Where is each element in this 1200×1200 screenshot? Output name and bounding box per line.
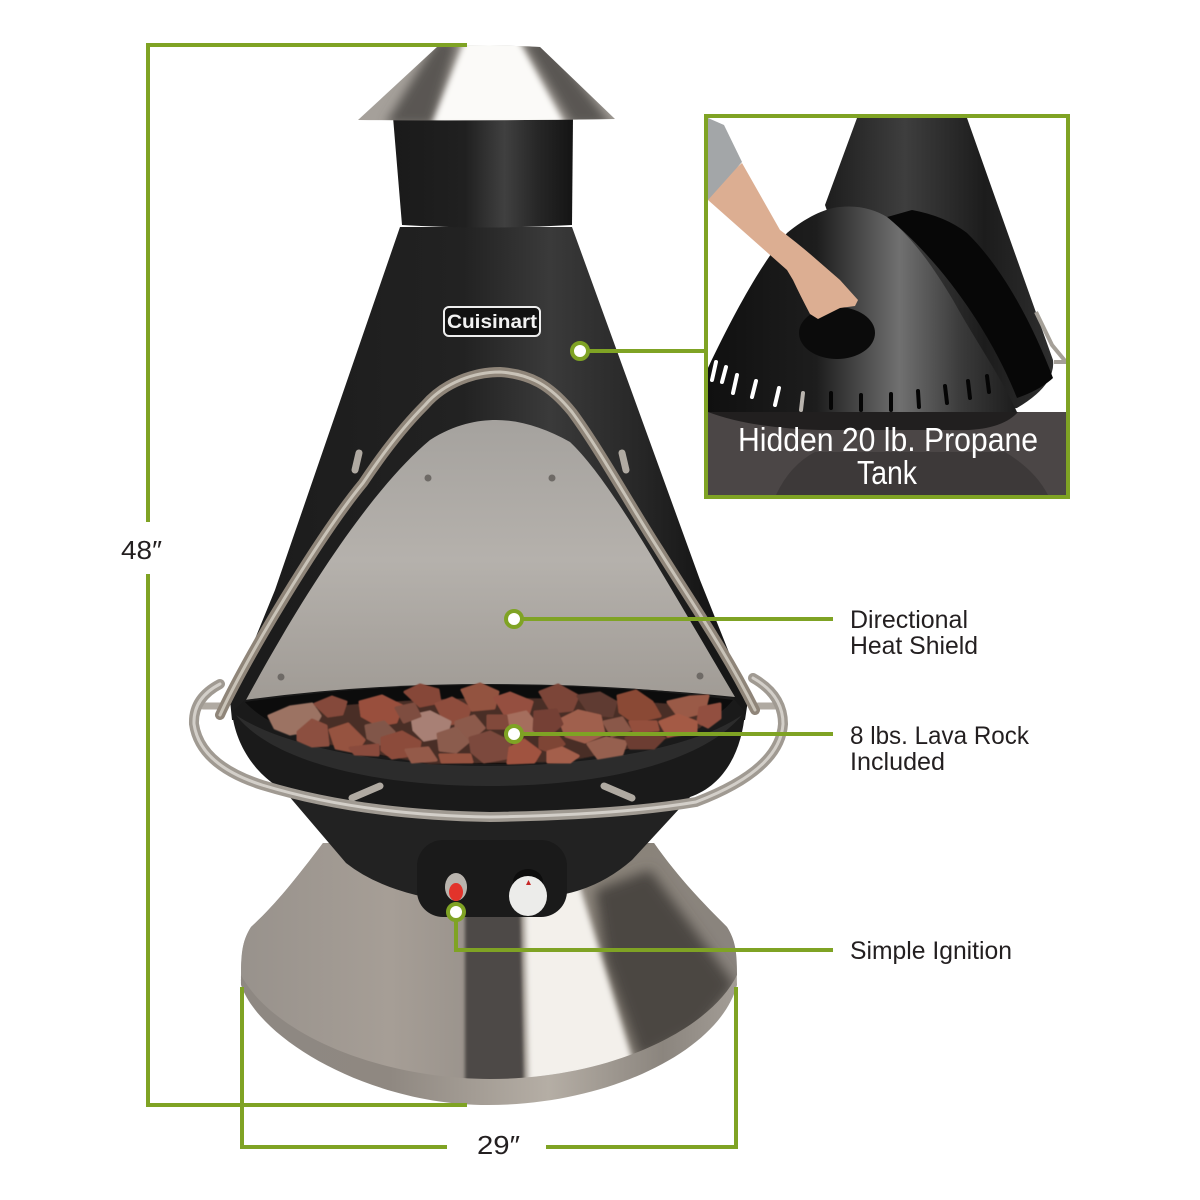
dimension: width 29 inches: 29″	[477, 1130, 520, 1160]
callout: lava rock included	[506, 722, 1029, 776]
inset: caption	[738, 421, 1038, 491]
inset: sleeve	[708, 118, 742, 200]
callout: lava rock included: Included	[850, 748, 945, 776]
callout: simple ignition	[448, 904, 1012, 965]
lower black bowl	[288, 795, 692, 900]
handle side brackets	[203, 453, 775, 798]
inset: arm and hand	[708, 163, 858, 319]
inset: support bar	[1036, 312, 1066, 362]
inset: caption: Hidden 20 lb. Propane	[738, 421, 1038, 458]
dimension: height 48 inches: 48″	[121, 535, 162, 565]
inset: caption background band	[708, 412, 1066, 495]
inset panel: hidden propane tank	[700, 116, 1068, 497]
triangular stainless handle	[220, 372, 755, 715]
directional heat shield panel	[246, 420, 735, 700]
dimension: width 29 inches	[242, 987, 736, 1160]
callout: simple ignition: Simple Ignition	[850, 937, 1012, 965]
inset: removable door	[708, 206, 1017, 412]
chimney pipe	[393, 117, 573, 228]
chimney cap	[358, 46, 615, 120]
dimension: height 48 inches	[121, 45, 467, 1105]
callout: directional heat shield	[506, 606, 978, 660]
brand badge: Cuisinart	[447, 312, 538, 333]
fire pit product illustration	[194, 40, 783, 1105]
circular stainless guard rail	[194, 678, 783, 817]
chimney cone body	[230, 227, 748, 720]
inset: base seen through the band	[708, 412, 1048, 495]
callout: connector to propane inset	[572, 343, 706, 359]
callout: directional heat shield: Heat Shield	[850, 632, 978, 660]
inset: door oval handle plate	[799, 307, 875, 359]
callout: directional heat shield: Directional	[850, 606, 968, 634]
brand badge	[444, 307, 540, 336]
stainless steel base	[235, 840, 745, 1105]
inset: open cavity	[887, 210, 1053, 398]
infographic: fire pit feature diagram	[122, 43, 1070, 1154]
inset: green frame	[706, 116, 1068, 497]
control panel with ignition and knob	[417, 840, 567, 917]
inset: vent slots	[712, 362, 989, 410]
callout: lava rock included: 8 lbs. Lava Rock	[850, 722, 1029, 750]
inset: caption: Tank	[857, 454, 917, 491]
lava rocks	[269, 684, 720, 764]
fire bowl with black rim	[232, 684, 745, 812]
inset: rear cone shell	[825, 118, 1053, 420]
